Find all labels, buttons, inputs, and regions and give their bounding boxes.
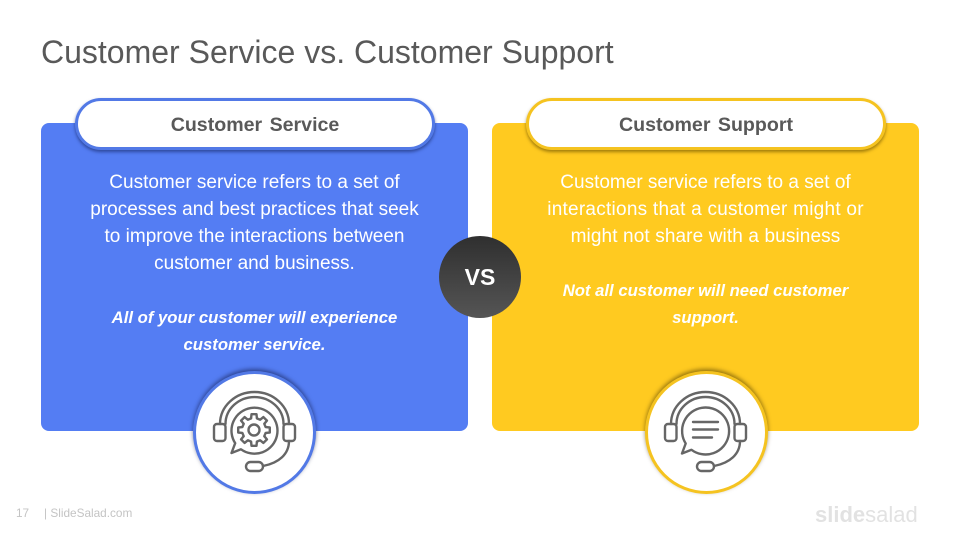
text block: customer support description: support.: [672, 308, 739, 327]
heading pill: customer support: Customer Support: [619, 114, 793, 136]
logo: slidesalad: slidesalad: [815, 502, 918, 527]
text block: customer service description: customer and business.: [154, 253, 355, 274]
heading pill: customer support: [526, 98, 886, 150]
text block: customer service description: All of your customer will experience: [112, 308, 397, 327]
vs badge: VS: [465, 264, 495, 290]
text block: customer support description: Not all customer will need customer: [563, 281, 848, 300]
text block: customer support description: Customer service refers to a set of: [560, 172, 851, 193]
icon: headset with gear: [212, 390, 296, 472]
icon: headset with chat lines: [664, 390, 748, 472]
heading pill: customer service: [75, 98, 435, 150]
icon circle: customer service: [193, 371, 316, 494]
page number and footer text: 17: [16, 506, 29, 520]
panel: customer service: [41, 123, 468, 431]
page number and footer text: | SlideSalad.com: [44, 506, 132, 520]
title: Customer Service vs. Customer Support: [41, 34, 614, 70]
text block: customer support description: might not share with a business: [571, 226, 840, 247]
icon circle: customer support: [645, 371, 768, 494]
heading pill: customer service: Customer Service: [171, 114, 339, 136]
text block: customer service description: Customer service refers to a set of: [109, 172, 400, 193]
text block: customer service description: to improve the interactions between: [105, 226, 404, 247]
text block: customer service description: customer service.: [184, 335, 325, 354]
text block: customer support description: [547, 172, 864, 327]
vs badge: [439, 236, 521, 318]
text block: customer service description: processes and best practices that seek: [90, 199, 419, 220]
panel: customer support: [492, 123, 919, 431]
text block: customer support description: interactions that a customer might or: [547, 199, 864, 220]
text block: customer service description: [90, 172, 419, 354]
